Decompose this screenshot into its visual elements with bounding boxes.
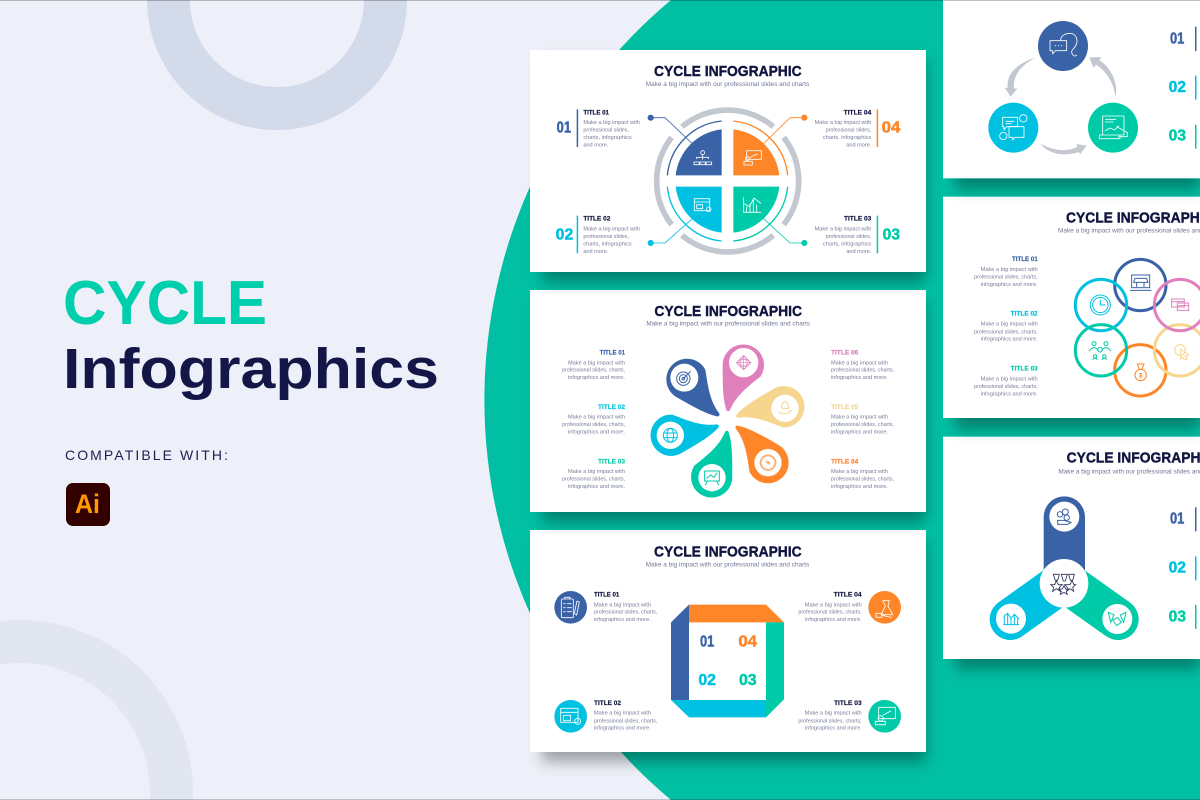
ring: cyan bbox=[1075, 279, 1127, 331]
icon: line chart bbox=[744, 198, 761, 212]
text block: title 01: professional slides, charts, bbox=[562, 368, 625, 374]
icon: handshake bbox=[1102, 604, 1132, 634]
slide subtitle: Make a big impact with our professional slides and charts bbox=[646, 321, 811, 328]
icon: green board bbox=[698, 464, 726, 491]
text block: title 03: professional slides, charts, bbox=[562, 477, 625, 483]
icon: sand hand and bag bbox=[771, 395, 799, 422]
petal: sand bbox=[734, 379, 812, 448]
text block: title 01: infographics and more. bbox=[568, 375, 625, 381]
quadrant: blue bbox=[676, 129, 722, 175]
text block: 02: TITLE 02 bbox=[583, 216, 611, 223]
shadow: three arm slide bbox=[955, 447, 1200, 669]
text block: title 01: TITLE 01 bbox=[600, 349, 625, 356]
icon: orange percent: % bbox=[766, 461, 771, 467]
text block: title 03: TITLE 03 bbox=[598, 458, 625, 465]
node: blue circle with chat and ear icon bbox=[1038, 21, 1088, 71]
text block: 02 bbox=[556, 216, 640, 255]
text block: title 03: Make a big impact with bbox=[981, 376, 1038, 382]
text block: title 01: professional slides, charts, bbox=[594, 610, 658, 616]
text block: title 03: TITLE 03 bbox=[834, 700, 862, 707]
number: 01: 01 bbox=[1170, 511, 1185, 528]
icon: bar chart bbox=[996, 604, 1026, 634]
arm: blue bbox=[1002, 517, 1126, 582]
text block: title 02: professional slides, charts, bbox=[974, 329, 1038, 335]
text block: title 06: professional slides, charts, bbox=[831, 368, 894, 374]
panel: six petal cycle slide bbox=[530, 290, 926, 512]
number: 04: 04 bbox=[738, 634, 758, 651]
text block: 04: 04 bbox=[882, 120, 901, 137]
arrow: green to blue bbox=[1089, 57, 1116, 97]
panel: three circle cycle slide (cropped right) bbox=[943, 0, 1200, 178]
outer grey segmented ring bbox=[657, 110, 799, 252]
number: 02: 02 bbox=[1169, 560, 1186, 577]
quadrant: orange bbox=[733, 129, 779, 175]
text block: title 05: professional slides, charts, bbox=[831, 422, 894, 428]
number: 02 bbox=[1169, 556, 1196, 580]
text block: title 05: Make a big impact with bbox=[831, 415, 888, 421]
text block: title 04 bbox=[798, 591, 862, 623]
text block: title 02: TITLE 02 bbox=[598, 404, 625, 411]
text block: title 01: professional slides, charts, bbox=[974, 275, 1038, 281]
text block: title 04: infographics and more. bbox=[805, 617, 862, 623]
text block: title 04: infographics and more. bbox=[831, 484, 888, 490]
text block: 04: Make a big impact with bbox=[815, 120, 871, 126]
text block: title 02: TITLE 02 bbox=[594, 700, 621, 707]
slide title: CYCLE INFOGRAPHIC bbox=[654, 63, 802, 80]
text block: 01: Make a big impact with bbox=[583, 120, 640, 126]
icon: blue target bbox=[670, 364, 698, 392]
icon: browser settings bbox=[694, 199, 711, 212]
icon: money bag: $ bbox=[1139, 372, 1143, 379]
number: 03: 03 bbox=[1169, 128, 1186, 145]
panel: four quadrant cycle slide bbox=[530, 50, 926, 272]
text block: title 04: Make a big impact with bbox=[831, 469, 888, 475]
left title block bbox=[63, 269, 439, 526]
icon: coins in hand bbox=[1049, 502, 1079, 532]
text block: 03: Make a big impact with bbox=[815, 226, 871, 232]
slide title: CYCLE INFOGRAPHIC bbox=[654, 303, 802, 320]
petal: blue bbox=[659, 351, 737, 420]
text block: 04: professional slides, bbox=[826, 128, 872, 134]
text block: title 04: professional slides, charts, bbox=[798, 610, 862, 616]
node: cyan circle with chat icon bbox=[988, 103, 1038, 153]
text block: title 01: infographics and more. bbox=[981, 282, 1038, 288]
text block: 03: professional slides, bbox=[826, 234, 872, 240]
shadow: six ring slide bbox=[955, 207, 1200, 429]
ring: blue bbox=[1115, 259, 1166, 311]
heading: Infographics: Infographics bbox=[63, 337, 439, 401]
slide subtitle: Make a big impact with our professional slides and charts bbox=[646, 561, 810, 568]
number: 01: 01 bbox=[700, 634, 715, 651]
arrow: blue to cyan bbox=[1005, 57, 1036, 97]
icon: orange percent bbox=[754, 449, 782, 476]
text block: 04: and more. bbox=[846, 142, 872, 148]
text block: 03: 03 bbox=[883, 226, 900, 243]
text block: title 03: TITLE 03 bbox=[1011, 365, 1038, 372]
ring: sand bbox=[1154, 325, 1200, 376]
text block: 02: and more. bbox=[583, 249, 609, 255]
text block: title 03: professional slides, charts, bbox=[974, 384, 1038, 390]
panel: three arm cycle slide (cropped right) bbox=[943, 437, 1200, 659]
number: 01: 01 bbox=[1170, 30, 1185, 47]
text block: title 02 bbox=[974, 311, 1038, 343]
icon: credit cards bbox=[1172, 299, 1189, 310]
heading: CYCLE: CYCLE bbox=[63, 269, 267, 338]
text block: 04 bbox=[815, 109, 901, 148]
icon: org chart bbox=[694, 151, 712, 165]
icon: flask in hand bbox=[868, 591, 901, 624]
text block: title 02: Make a big impact with bbox=[981, 322, 1038, 328]
text block: title 04: Make a big impact with bbox=[805, 602, 862, 608]
number: 01 bbox=[1170, 27, 1196, 51]
petal: green bbox=[691, 431, 732, 498]
number: 01 bbox=[1170, 507, 1196, 531]
number: 03 bbox=[1169, 605, 1196, 629]
leader line: 01 bbox=[648, 115, 693, 144]
number: 02 bbox=[1169, 76, 1196, 100]
number: 03: 03 bbox=[739, 672, 757, 689]
text block: 04: charts, infographics bbox=[823, 135, 871, 141]
text block: title 05: TITLE 05 bbox=[831, 404, 859, 411]
text block: 02: professional slides, bbox=[583, 234, 629, 240]
text block: 03: charts, infographics bbox=[823, 241, 871, 247]
inner coloured arcs bbox=[667, 121, 788, 241]
arm: cyan bbox=[1010, 581, 1064, 619]
arrow: cyan to green bbox=[1040, 144, 1087, 154]
text block: title 03 bbox=[798, 700, 862, 732]
petal: orange bbox=[718, 422, 796, 491]
text block: title 01: TITLE 01 bbox=[1012, 256, 1038, 263]
icon: clipboard bbox=[554, 591, 587, 624]
icon: presentation board bbox=[744, 151, 761, 165]
text block: 02: 02 bbox=[556, 226, 573, 243]
text block: 01: TITLE 01 bbox=[583, 109, 609, 116]
text block: title 02: infographics and more. bbox=[568, 430, 625, 436]
petal: pink bbox=[723, 344, 764, 411]
text block: title 04: professional slides, charts, bbox=[831, 477, 894, 483]
arm: green bbox=[1064, 581, 1118, 619]
text block: 02: Make a big impact with bbox=[583, 226, 640, 232]
text block: 03 bbox=[815, 216, 900, 255]
icon: team bbox=[1089, 342, 1111, 360]
text block: title 01: infographics and more. bbox=[594, 617, 651, 623]
text block: title 03 bbox=[974, 365, 1038, 397]
square segment: green bbox=[766, 622, 784, 717]
text block: title 02: TITLE 02 bbox=[1011, 311, 1038, 318]
text block: title 02: professional slides, charts, bbox=[562, 422, 625, 428]
text block: title 06: infographics and more. bbox=[831, 375, 888, 381]
text block: title 03: Make a big impact with bbox=[805, 711, 862, 717]
text block: title 03 bbox=[562, 458, 625, 490]
text block: title 02 bbox=[594, 700, 658, 732]
square segment: orange bbox=[689, 605, 784, 622]
icon: Adobe Illustrator: Ai bbox=[75, 489, 100, 519]
text block: title 03: Make a big impact with bbox=[568, 469, 625, 475]
hub with medals icon bbox=[1040, 559, 1088, 608]
text block: title 02: infographics and more. bbox=[594, 726, 651, 732]
text block: 02: charts, infographics bbox=[583, 241, 632, 247]
text block: 01: charts, infographics bbox=[583, 135, 632, 141]
square segment: blue bbox=[671, 605, 689, 700]
text block: title 02: professional slides, charts, bbox=[594, 718, 658, 724]
text block: title 01: Make a big impact with bbox=[981, 267, 1038, 273]
text block: title 02: Make a big impact with bbox=[568, 415, 625, 421]
decorative ring: top bbox=[147, 0, 407, 130]
compatible with label: COMPATIBLE WITH: bbox=[65, 447, 228, 463]
text block: title 03: professional slides, charts, bbox=[798, 718, 862, 724]
shadow: quadrant slide bbox=[542, 60, 926, 282]
quadrant: green bbox=[733, 187, 779, 233]
number: 02: 02 bbox=[1169, 79, 1186, 96]
square segment: cyan bbox=[671, 700, 766, 717]
text block: title 04: TITLE 04 bbox=[834, 591, 862, 598]
slide subtitle: Make a big impact with our professional slides and charts bbox=[646, 81, 810, 88]
number: 02: 02 bbox=[698, 672, 716, 689]
text block: title 01 bbox=[974, 256, 1038, 288]
slide title: CYCLE INFOGRAPHIC bbox=[654, 543, 802, 560]
icon: browser settings bbox=[554, 700, 587, 733]
number: 03: 03 bbox=[1169, 608, 1186, 625]
text block: title 04: TITLE 04 bbox=[831, 458, 859, 465]
text block: 01: and more. bbox=[583, 142, 609, 148]
panel: square cycle slide bbox=[530, 530, 926, 752]
node: green circle with document icon bbox=[1088, 103, 1138, 153]
icon: cyan globe bbox=[657, 422, 684, 449]
text block: title 02: infographics and more. bbox=[981, 337, 1038, 343]
shadow: three circle slide bbox=[955, 0, 1200, 189]
icon: money bag bbox=[1135, 364, 1146, 381]
text block: title 02: Make a big impact with bbox=[594, 711, 651, 717]
text block: title 01: Make a big impact with bbox=[568, 360, 625, 366]
text block: title 03: infographics and more. bbox=[805, 726, 862, 732]
text block: 01: professional slides, bbox=[583, 128, 629, 134]
petal: cyan bbox=[643, 394, 721, 463]
number: 03 bbox=[1169, 125, 1196, 149]
leader line: 04 bbox=[763, 115, 807, 144]
ring: green bbox=[1075, 325, 1127, 376]
icon: click hand bbox=[1175, 345, 1189, 360]
text block: title 01 bbox=[594, 591, 658, 623]
quadrant: cyan bbox=[676, 187, 722, 233]
icon: Adobe Illustrator bbox=[66, 483, 110, 526]
text block: title 06 bbox=[831, 349, 894, 381]
icon: shop laptop bbox=[1130, 275, 1151, 290]
icon: presentation bbox=[868, 700, 901, 733]
shadow: petal slide bbox=[542, 300, 926, 522]
text block: title 02 bbox=[562, 404, 625, 436]
text block: 03: and more. bbox=[846, 249, 872, 255]
text block: title 06: TITLE 06 bbox=[831, 349, 859, 356]
decorative ring: bottom left bbox=[0, 620, 193, 800]
text block: title 03: infographics and more. bbox=[981, 391, 1038, 397]
text block: title 04 bbox=[831, 458, 894, 490]
text block: 01: 01 bbox=[557, 120, 571, 137]
text block: title 01: Make a big impact with bbox=[594, 602, 651, 608]
icon: pink compass bbox=[729, 348, 758, 377]
text block: 01 bbox=[557, 109, 640, 148]
text block: title 03: infographics and more. bbox=[568, 484, 625, 490]
panel: six ring cycle slide (cropped right) bbox=[943, 197, 1200, 418]
text block: title 05: infographics and more. bbox=[831, 430, 888, 436]
leader line: 03 bbox=[763, 218, 807, 246]
shadow: square slide bbox=[542, 540, 926, 762]
text block: title 06: Make a big impact with bbox=[831, 360, 888, 366]
text block: title 01: TITLE 01 bbox=[594, 591, 620, 598]
ring: pink bbox=[1154, 279, 1200, 331]
text block: 04: TITLE 04 bbox=[844, 109, 872, 116]
leader line: 02 bbox=[648, 218, 693, 246]
text block: title 05 bbox=[831, 404, 894, 436]
icon: clock bbox=[1090, 295, 1110, 315]
green background circle bbox=[484, 0, 1200, 800]
text block: title 01 bbox=[562, 349, 625, 381]
ring: orange bbox=[1115, 345, 1166, 396]
text block: 03: TITLE 03 bbox=[844, 216, 872, 223]
